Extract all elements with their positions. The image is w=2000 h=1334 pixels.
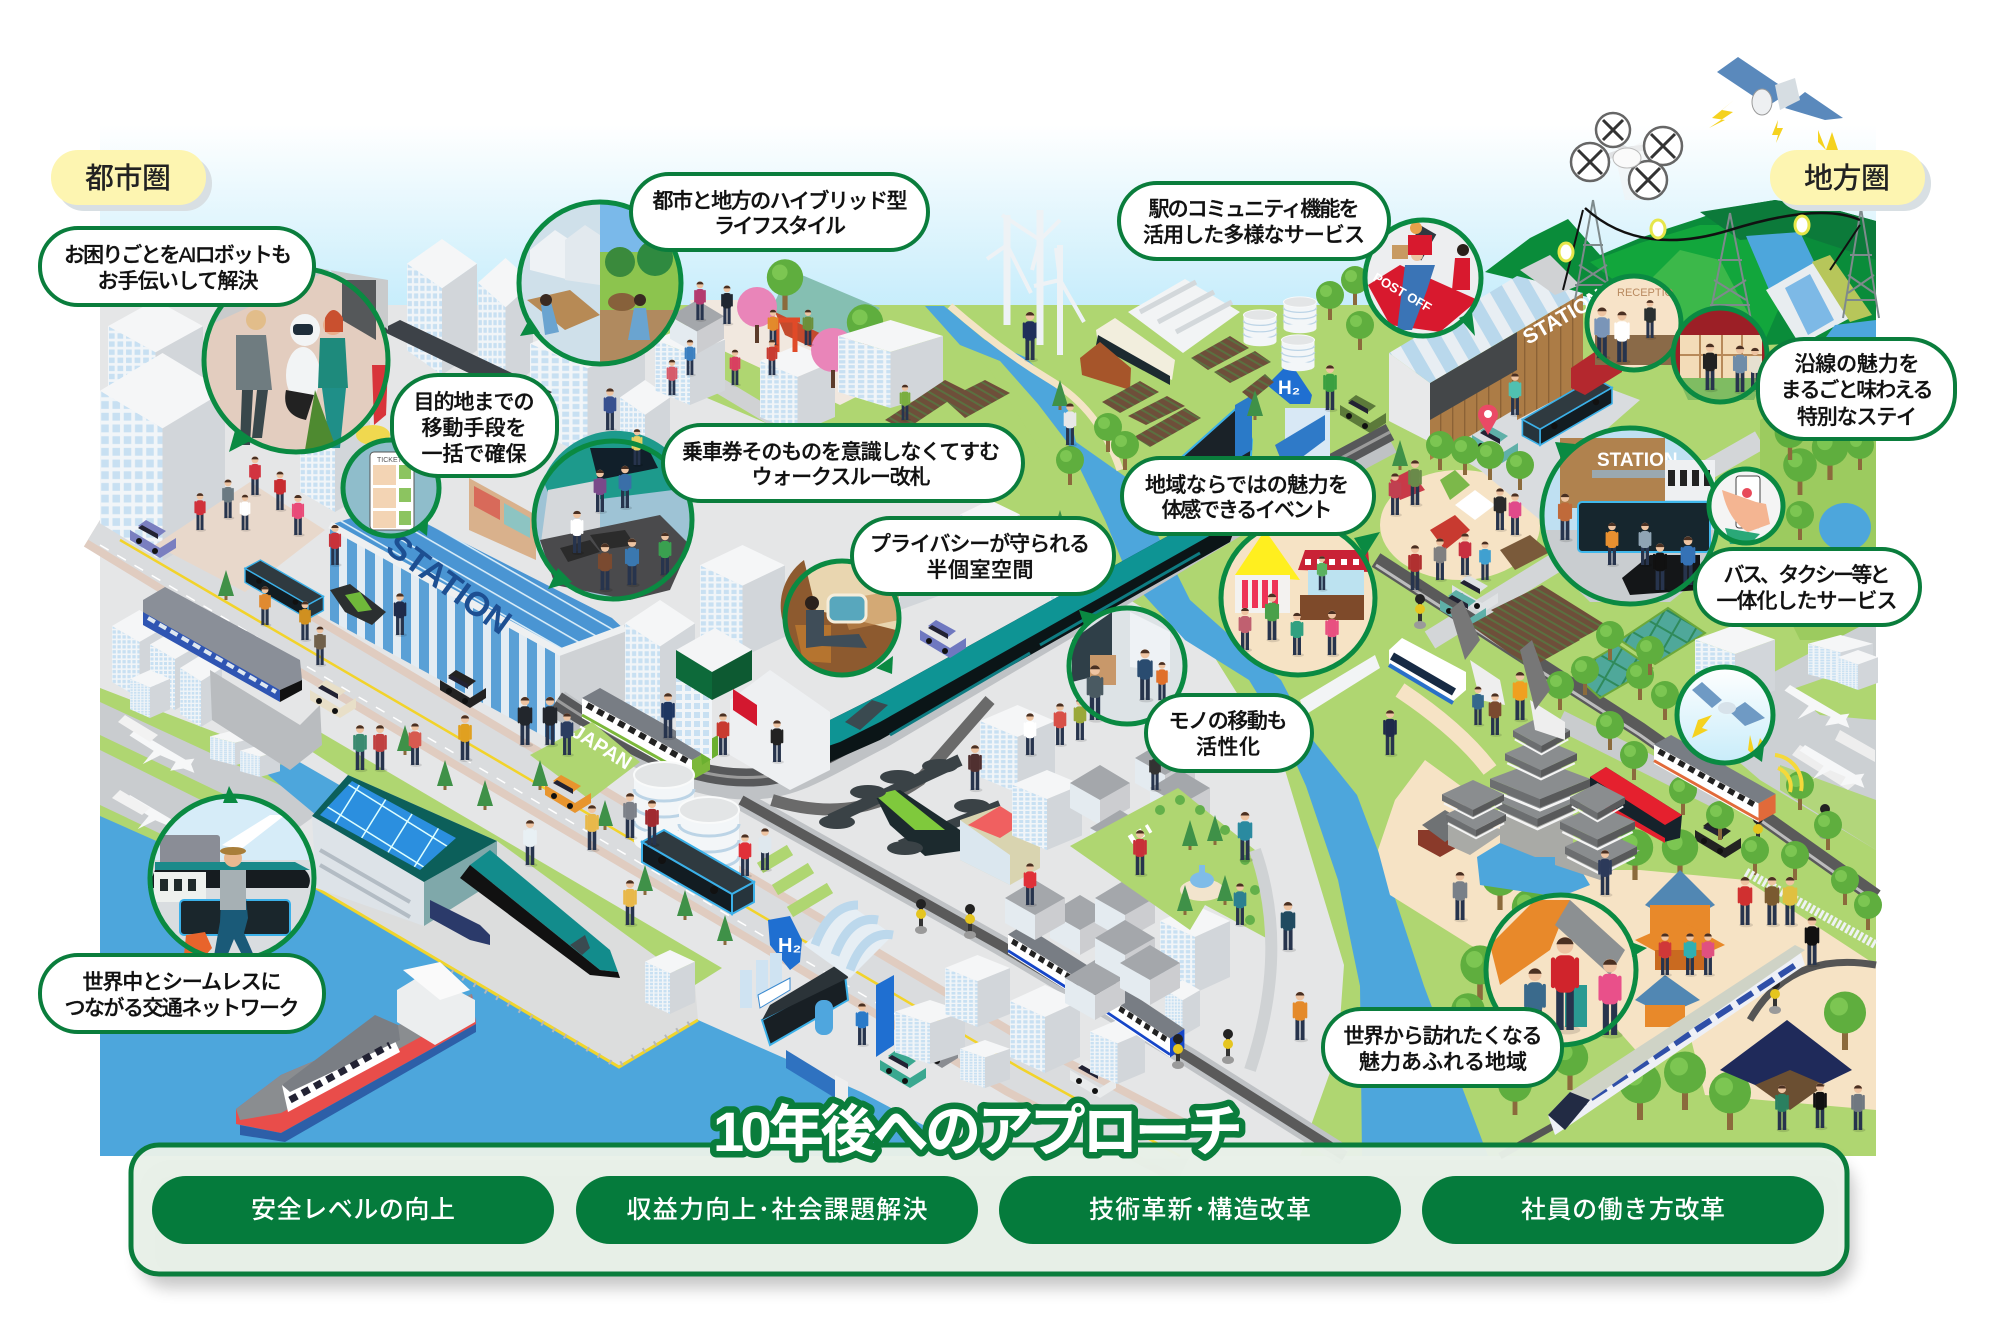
callout: tourism xyxy=(1323,1009,1562,1086)
orange-white commuter train xyxy=(1654,735,1776,822)
pylons and power line xyxy=(1559,200,1879,325)
market plaza xyxy=(1380,470,1540,580)
greenhouses xyxy=(1128,279,1240,353)
region tag: urban: 都市圏 xyxy=(85,162,171,195)
shrine grounds xyxy=(690,300,900,405)
market stalls xyxy=(1390,470,1550,570)
fence xyxy=(1746,872,1876,945)
storage tanks xyxy=(634,762,739,888)
circle: traveler xyxy=(148,796,314,969)
callout: semi-private seat: 半個室空間 xyxy=(926,559,1034,582)
ring: station bus xyxy=(1542,428,1718,604)
tower buildings upper left xyxy=(100,239,1110,728)
navy temple xyxy=(1720,1020,1852,1110)
satellite xyxy=(1717,57,1843,120)
hydrogen sign: H₂ xyxy=(778,935,801,957)
callout: walk-through gate: ウォークスルー改札 xyxy=(752,466,930,489)
parkland xyxy=(1760,350,1876,640)
moat xyxy=(1477,843,1590,897)
elevated viaduct upper xyxy=(557,432,1390,786)
white building with red panel xyxy=(730,670,830,790)
green lawn upper district xyxy=(640,305,1040,500)
cars xyxy=(130,395,1741,1138)
circle: event market xyxy=(1221,521,1375,675)
circle: post office xyxy=(1365,220,1481,336)
green commuter train xyxy=(582,688,718,780)
hydrogen tanks xyxy=(740,953,790,1008)
circle: station and bus xyxy=(1542,428,1718,604)
map pin xyxy=(1478,405,1498,435)
right station: STATION xyxy=(1519,285,1608,349)
road stripes lawn xyxy=(760,850,830,912)
callout: global network: つながる交通ネットワーク xyxy=(64,997,300,1020)
callout: AI robot: お困りごとをAIロボットも xyxy=(64,244,292,267)
tail: tourists xyxy=(1631,942,1647,957)
pill: innovation xyxy=(999,1176,1401,1244)
insulator nodes xyxy=(1559,216,1809,261)
bus blue sign and H2 xyxy=(1145,362,1330,520)
pill: workstyle: 社員の働き方改革 xyxy=(1521,1196,1725,1224)
blue-grey train at left xyxy=(143,587,302,702)
elevated station platform xyxy=(210,670,322,770)
houses xyxy=(1005,740,1210,1020)
ring: ryokan xyxy=(1673,308,1767,402)
pill: safety: 安全レベルの向上 xyxy=(251,1196,455,1224)
bridge xyxy=(1300,655,1380,715)
urban bus xyxy=(642,830,754,914)
lower railway xyxy=(741,700,1345,1156)
crowd xyxy=(194,312,1865,1132)
ring: seat xyxy=(785,561,899,675)
drone xyxy=(1571,113,1682,200)
callout: tourism: 魅力あふれる地域 xyxy=(1359,1051,1527,1074)
train at depot xyxy=(430,900,490,945)
pill: safety xyxy=(152,1176,554,1244)
pill: workstyle xyxy=(1422,1176,1824,1244)
circle: walk-through gate xyxy=(534,429,692,600)
urban ground xyxy=(100,305,1344,1156)
panel shadow xyxy=(139,1160,1854,1288)
callout: special stay: まるごと味わえる xyxy=(1780,379,1934,402)
tanker truck xyxy=(786,1050,848,1105)
callout: hybrid lifestyle xyxy=(631,174,928,250)
callout: one-stop booking xyxy=(392,375,557,476)
plaza bus xyxy=(245,560,323,619)
right tower xyxy=(1555,845,1640,880)
JAPAN lawn xyxy=(530,721,640,800)
pier xyxy=(316,816,698,1067)
main keep xyxy=(1495,782,1580,829)
ring: phone hand xyxy=(1709,469,1783,543)
main road xyxy=(100,520,1190,1156)
tail: ticket xyxy=(415,522,428,536)
right railway xyxy=(1376,560,1876,1156)
red bus by castle xyxy=(1590,767,1682,843)
tail: hybrid xyxy=(520,318,540,336)
tail: event xyxy=(1354,532,1380,556)
main station xyxy=(330,505,625,745)
tail: logistics xyxy=(1079,610,1098,628)
ring: hybrid lifestyle xyxy=(519,202,681,364)
callout: tourism: 世界から訪れたくなる xyxy=(1344,1025,1542,1048)
callout: local events: 地域ならではの魅力を xyxy=(1145,474,1349,497)
callout: one-stop booking: 目的地までの xyxy=(414,391,534,414)
circle: post office: POST OFF xyxy=(1370,270,1434,315)
ring: gate xyxy=(534,441,692,599)
callout: one-stop booking: 一括で確保 xyxy=(422,443,526,466)
tan path near park xyxy=(1400,690,1490,770)
paddy fields xyxy=(1572,608,1705,698)
white bus and trucks xyxy=(1389,600,1565,740)
ring: AI robot xyxy=(204,268,388,452)
ship xyxy=(236,962,476,1142)
ring: logistics xyxy=(1069,608,1185,724)
temple pavilions xyxy=(1635,870,1725,1027)
shinkansen on viaduct xyxy=(811,505,1238,762)
callout: community: 活用した多様なサービス xyxy=(1143,224,1365,247)
small green eVTOL on plaza xyxy=(330,584,386,625)
brown farm fields xyxy=(1102,336,1606,668)
circle: reception xyxy=(1587,276,1681,370)
circle: phone hand xyxy=(1709,469,1783,544)
tail: traveler xyxy=(223,786,238,803)
pill: revenue: 収益力向上･社会課題解決 xyxy=(626,1196,928,1224)
callout: local events: 体感できるイベント xyxy=(1162,498,1332,522)
ring: traveler xyxy=(150,796,314,960)
callout: logistics: モノの移動も xyxy=(1168,710,1288,733)
callout: logistics: 活性化 xyxy=(1196,736,1260,759)
callout: special stay: 特別なステイ xyxy=(1797,406,1917,429)
tall building middle xyxy=(980,705,1055,793)
fields by river xyxy=(885,380,1010,430)
trees xyxy=(218,261,1882,1130)
shrine visitors xyxy=(604,281,911,432)
tail: AI robot xyxy=(229,427,252,452)
wifi signal xyxy=(1775,755,1802,792)
gray road ring xyxy=(1250,850,1271,1070)
region tag: rural xyxy=(1770,150,1931,211)
right tan plaza xyxy=(1378,760,1876,1110)
callout: walk-through gate xyxy=(663,425,1023,501)
callout: hybrid lifestyle: ライフスタイル xyxy=(714,215,846,238)
road on right xyxy=(1430,440,1760,640)
circle: hybrid lifestyle xyxy=(519,202,681,364)
callout: logistics xyxy=(1146,695,1312,771)
inlet xyxy=(262,760,348,815)
pavilion xyxy=(1418,810,1470,857)
river xyxy=(925,306,1488,1156)
circle: tourists xyxy=(1486,895,1636,1045)
circle: station and bus: STATION xyxy=(1597,450,1678,471)
red roof building xyxy=(960,806,1040,885)
main station: STATION xyxy=(379,527,518,642)
pond xyxy=(1819,503,1871,551)
right station xyxy=(1389,255,1608,460)
factory blocks xyxy=(895,905,1230,1088)
callout: special stay: 沿線の魅力を xyxy=(1794,353,1920,376)
callout: walk-through gate: 乗車券そのものを意識しなくてすむ xyxy=(682,441,1000,464)
ring: reception xyxy=(1587,276,1681,370)
approach panel xyxy=(131,1145,1847,1274)
ring: event market xyxy=(1221,521,1375,675)
pill: revenue xyxy=(576,1176,978,1244)
bus blue sign and H2: H₂ xyxy=(1278,378,1300,399)
small brick building xyxy=(645,950,695,1014)
ring: post office xyxy=(1365,220,1481,336)
callout: bus taxi: 一体化したサービス xyxy=(1716,590,1898,613)
ring: satellite inset xyxy=(1677,667,1773,763)
callout: special stay xyxy=(1758,339,1955,439)
JAPAN lawn: JAPAN xyxy=(567,721,635,774)
ring: ticket xyxy=(343,440,439,536)
isometric city map xyxy=(100,200,1882,1156)
upper city road xyxy=(660,350,860,470)
long distance bus and shed xyxy=(1080,318,1175,390)
sky gradient xyxy=(100,125,1876,315)
upper shrine xyxy=(737,259,883,388)
title: 10年後へのアプローチ xyxy=(713,1100,1243,1163)
hydrogen bus station xyxy=(762,960,894,1057)
callout: semi-private seat xyxy=(852,518,1114,594)
ground: green land xyxy=(100,305,1876,1156)
title: 10年後へのアプローチ xyxy=(713,1100,1243,1163)
crossing signals xyxy=(915,594,1831,1069)
dark train, upper left xyxy=(380,320,552,405)
castle xyxy=(1418,716,1640,897)
circle: ticket phone xyxy=(343,440,439,536)
circle: ryokan xyxy=(1673,308,1767,402)
beige office xyxy=(1012,770,1082,850)
callout: AI robot: お手伝いして解決 xyxy=(98,270,258,293)
callout: one-stop booking: 移動手段を xyxy=(422,417,526,440)
airport left xyxy=(100,688,316,870)
signal bolts xyxy=(1709,100,1838,150)
wind turbines xyxy=(987,210,1084,355)
rooftop helipad xyxy=(356,425,390,445)
white farm building xyxy=(838,320,943,408)
callout: bus taxi: バス、タクシー等と xyxy=(1724,564,1890,587)
callout: community: 駅のコミュニティ機能を xyxy=(1148,198,1360,221)
right bus xyxy=(1522,378,1612,445)
red bus near station xyxy=(1571,345,1622,395)
shinkansen at depot xyxy=(460,850,620,978)
limited express train xyxy=(1548,945,1805,1135)
ring: tourists xyxy=(1486,895,1636,1045)
callout: local events xyxy=(1122,458,1374,534)
right station forecourt xyxy=(1430,370,1640,520)
callout: semi-private seat: プライバシーが守られる xyxy=(870,533,1090,556)
tail: station bus xyxy=(1555,442,1575,462)
blue train xyxy=(1008,925,1184,1057)
callout: global network: 世界中とシームレスに xyxy=(82,971,282,994)
sea xyxy=(100,816,1005,1156)
tail: seat xyxy=(876,656,893,674)
tail: satellite inset xyxy=(1752,746,1764,762)
pill: innovation: 技術革新･構造改革 xyxy=(1089,1196,1311,1224)
circle: satellite inset xyxy=(1677,667,1773,763)
circle: AI robot xyxy=(204,265,388,452)
circle: semi-private seat xyxy=(781,560,899,676)
left tower xyxy=(1448,820,1507,855)
dam and lake xyxy=(1746,232,1876,345)
circle: reception: RECEPTIO xyxy=(1617,287,1674,299)
greenhouses dome xyxy=(804,905,893,978)
circle: ticket phone: TICKET xyxy=(377,457,403,464)
tail: gate xyxy=(548,568,572,589)
callout: AI robot xyxy=(40,228,314,305)
inset circles xyxy=(148,202,1783,1045)
callout: community xyxy=(1119,183,1389,259)
air taxi xyxy=(819,759,1000,856)
cylinder tanks xyxy=(1244,297,1316,371)
green roof building xyxy=(676,628,752,760)
green strip xyxy=(297,732,722,985)
hydrogen sign xyxy=(768,916,802,970)
callout: bus taxi xyxy=(1695,549,1920,625)
callout: global network xyxy=(40,955,324,1032)
park xyxy=(1070,788,1268,939)
mountains xyxy=(1485,200,1876,345)
small office cluster xyxy=(112,610,280,777)
region tag: urban xyxy=(51,150,212,211)
airport right xyxy=(1690,618,1876,850)
riverside path xyxy=(950,306,1120,470)
tail: post office xyxy=(1459,312,1475,336)
callout: hybrid lifestyle: 都市と地方のハイブリッド型 xyxy=(652,189,908,213)
tan annex with coloured panels xyxy=(469,478,536,560)
circle: logistics xyxy=(1069,608,1185,724)
solar depot xyxy=(312,775,497,926)
road 2 right xyxy=(1560,720,1720,800)
left plaza xyxy=(155,482,325,592)
region tag: rural: 地方圏 xyxy=(1804,162,1890,195)
right building and hangars xyxy=(1695,625,1878,705)
